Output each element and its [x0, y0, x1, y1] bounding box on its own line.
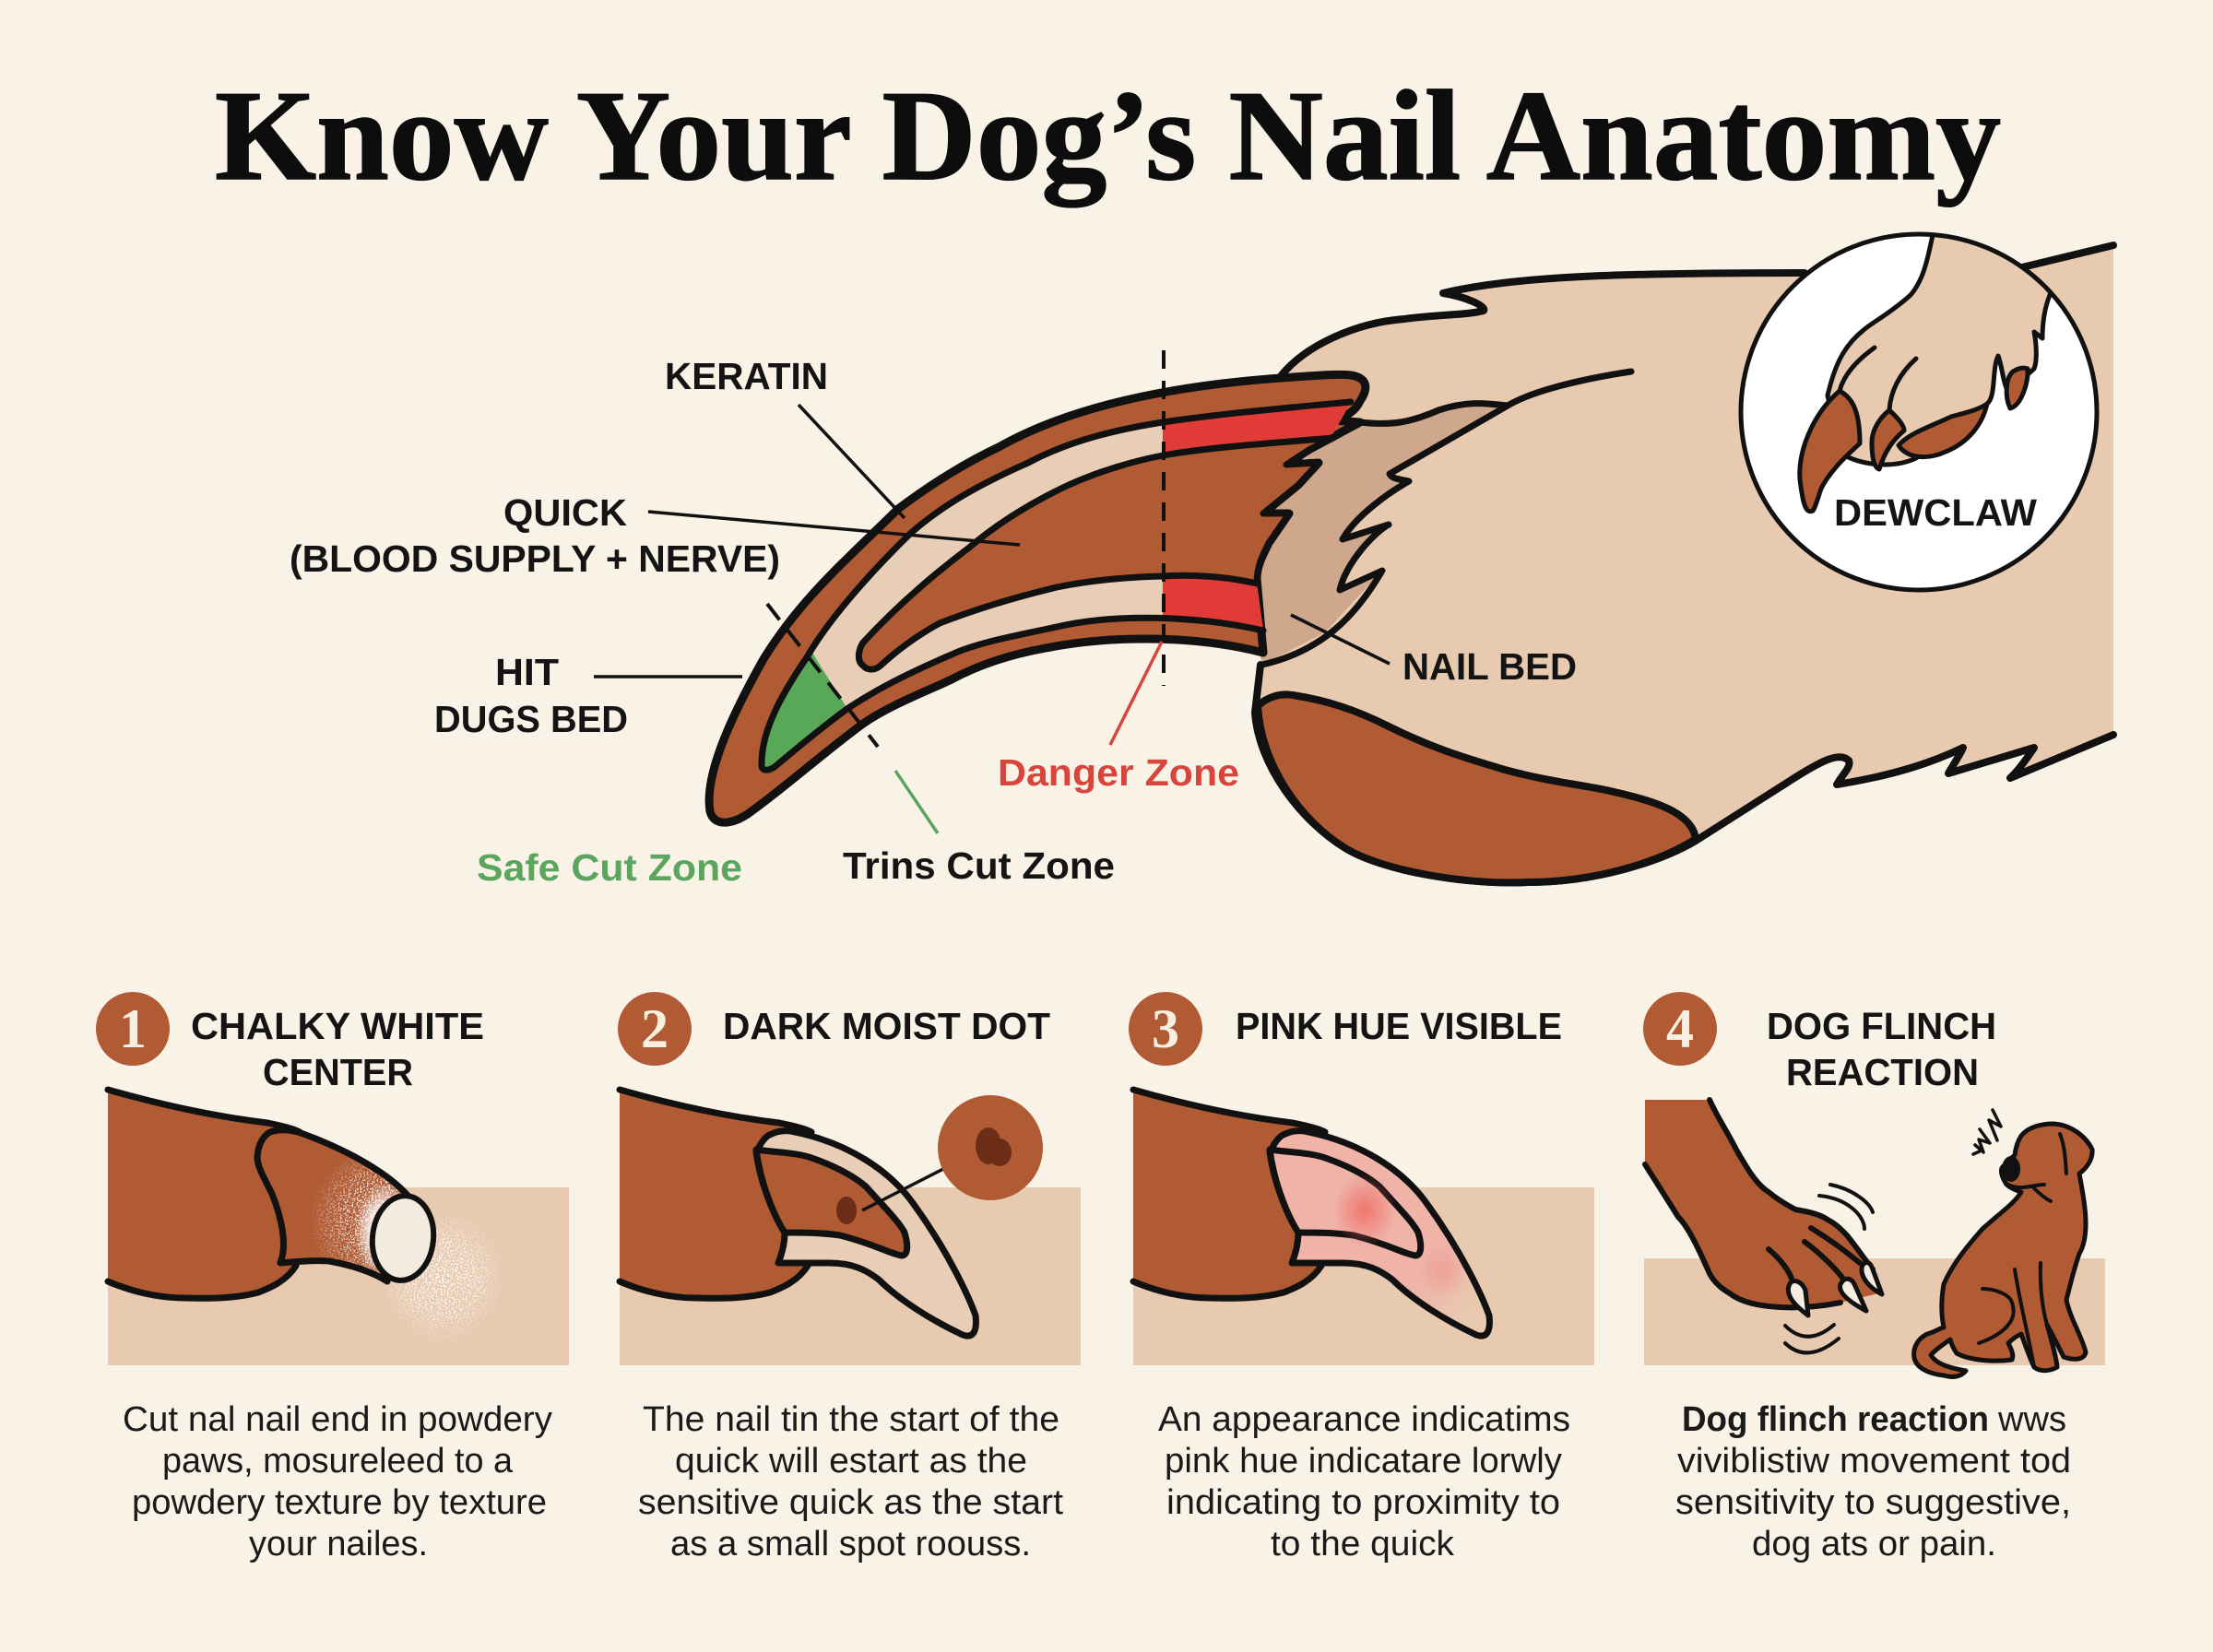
step 2: dark moist dot [618, 992, 1081, 1564]
quick 2 [756, 1150, 907, 1256]
safe cut zone fill [764, 654, 846, 767]
badge 3: 3 [1152, 998, 1179, 1059]
pale inner nail [762, 402, 1351, 770]
heading 4: DOG FLINCH [1767, 1005, 1996, 1047]
caption 1: powdery texture by texture [132, 1483, 547, 1522]
raised paw [1645, 1100, 1882, 1316]
label: trins cut zone: Trins Cut Zone [843, 844, 1115, 887]
step 3: pink hue visible [1129, 992, 1594, 1564]
nail bed [1236, 372, 1631, 665]
danger zone fills [1163, 406, 1349, 627]
inner nail outline [762, 402, 1351, 770]
label: nail bed: NAIL BED [1402, 645, 1577, 688]
caption 2 [638, 1400, 1063, 1564]
caption 4: sensitivity to suggestive, [1675, 1483, 2071, 1522]
motion arcs [1785, 1185, 1873, 1352]
badge 2 [618, 992, 692, 1066]
dewclaw claws [1800, 368, 2028, 512]
label: quick [290, 491, 780, 580]
chalk spray [311, 1158, 401, 1274]
illustration 2 [620, 1090, 1081, 1365]
paw body [1255, 245, 2113, 882]
inset: dewclaw [1741, 230, 2097, 590]
illustration 3 [1133, 1090, 1594, 1365]
dewclaw label: DEWCLAW [1834, 491, 2037, 534]
label: hit dugs bed [434, 651, 628, 740]
caption 4: viviblistiw movement tod [1677, 1442, 2071, 1481]
claw [709, 369, 1366, 822]
caption 3: to the quick [1271, 1525, 1455, 1564]
nail cut line: diagonal [767, 604, 878, 747]
label: keratin: KERATIN [665, 355, 828, 397]
caption 3 [1158, 1400, 1570, 1564]
illustration 1 [108, 1090, 569, 1365]
heading 4: REACTION [1786, 1051, 1979, 1093]
nail cut line: vertical [1162, 350, 1166, 686]
caption 4: dog ats or pain. [1752, 1525, 1996, 1564]
heading 1: CENTER [263, 1051, 413, 1093]
caption 1 [123, 1400, 552, 1564]
step 1: chalky white center [96, 992, 569, 1564]
caption 3: An appearance indicatims [1158, 1400, 1570, 1439]
caption 2: as a small spot roouss. [670, 1525, 1031, 1564]
badge 4: 4 [1666, 998, 1694, 1059]
label: safe cut zone: Safe Cut Zone [477, 846, 742, 889]
step 4: dog flinch reaction [1643, 992, 2105, 1564]
dark dot [836, 1197, 857, 1224]
badge 1: 1 [119, 998, 147, 1059]
pink quick [1270, 1150, 1421, 1256]
leader lines [594, 405, 1390, 833]
quick [858, 438, 1333, 669]
panel: main anatomy diagram [290, 230, 2113, 889]
label: quick: QUICK [503, 491, 627, 534]
badge 2: 2 [641, 998, 669, 1059]
caption 3: pink hue indicatare lorwly [1165, 1442, 1562, 1481]
badge 1 [96, 992, 170, 1066]
badge 4 [1643, 992, 1717, 1066]
heading 3: PINK HUE VISIBLE [1236, 1005, 1562, 1047]
caption 2: sensitive quick as the start [638, 1483, 1063, 1522]
caption 3: indicating to proximity to [1166, 1483, 1560, 1522]
caption 4 [1675, 1400, 2071, 1564]
caption 1: paws, mosureleed to a [162, 1442, 514, 1481]
magnified dot inset [938, 1095, 1043, 1200]
label: quick: (BLOOD SUPPLY + NERVE) [290, 537, 780, 580]
heading 4 [1767, 1005, 1996, 1093]
illustration 4 [1644, 1100, 2105, 1376]
label: danger zone: Danger Zone [998, 751, 1239, 794]
pain marks [1973, 1110, 2001, 1154]
label: hit dugs bed: DUGS BED [434, 698, 628, 740]
badge 3 [1129, 992, 1202, 1066]
paw pad [1258, 694, 1696, 882]
caption 1: your nailes. [249, 1525, 428, 1564]
dog [1914, 1110, 2092, 1376]
caption 1: Cut nal nail end in powdery [123, 1400, 552, 1439]
title: Know Your Dog’s Nail Anatomy [215, 65, 2001, 207]
caption 2: quick will estart as the [675, 1442, 1027, 1481]
keratin shell [709, 374, 1366, 822]
heading 1 [191, 1005, 484, 1093]
heading 1: CHALKY WHITE [191, 1005, 484, 1047]
label: hit dugs bed: HIT [495, 651, 559, 693]
dewclaw toe lines [1840, 348, 1916, 410]
heading 2: DARK MOIST DOT [723, 1005, 1050, 1047]
caption 2: The nail tin the start of the [643, 1400, 1059, 1439]
pink hot spots [1333, 1174, 1396, 1247]
caption 4: wws [1997, 1400, 2066, 1439]
caption 4: Dog flinch reaction [1682, 1400, 1989, 1439]
